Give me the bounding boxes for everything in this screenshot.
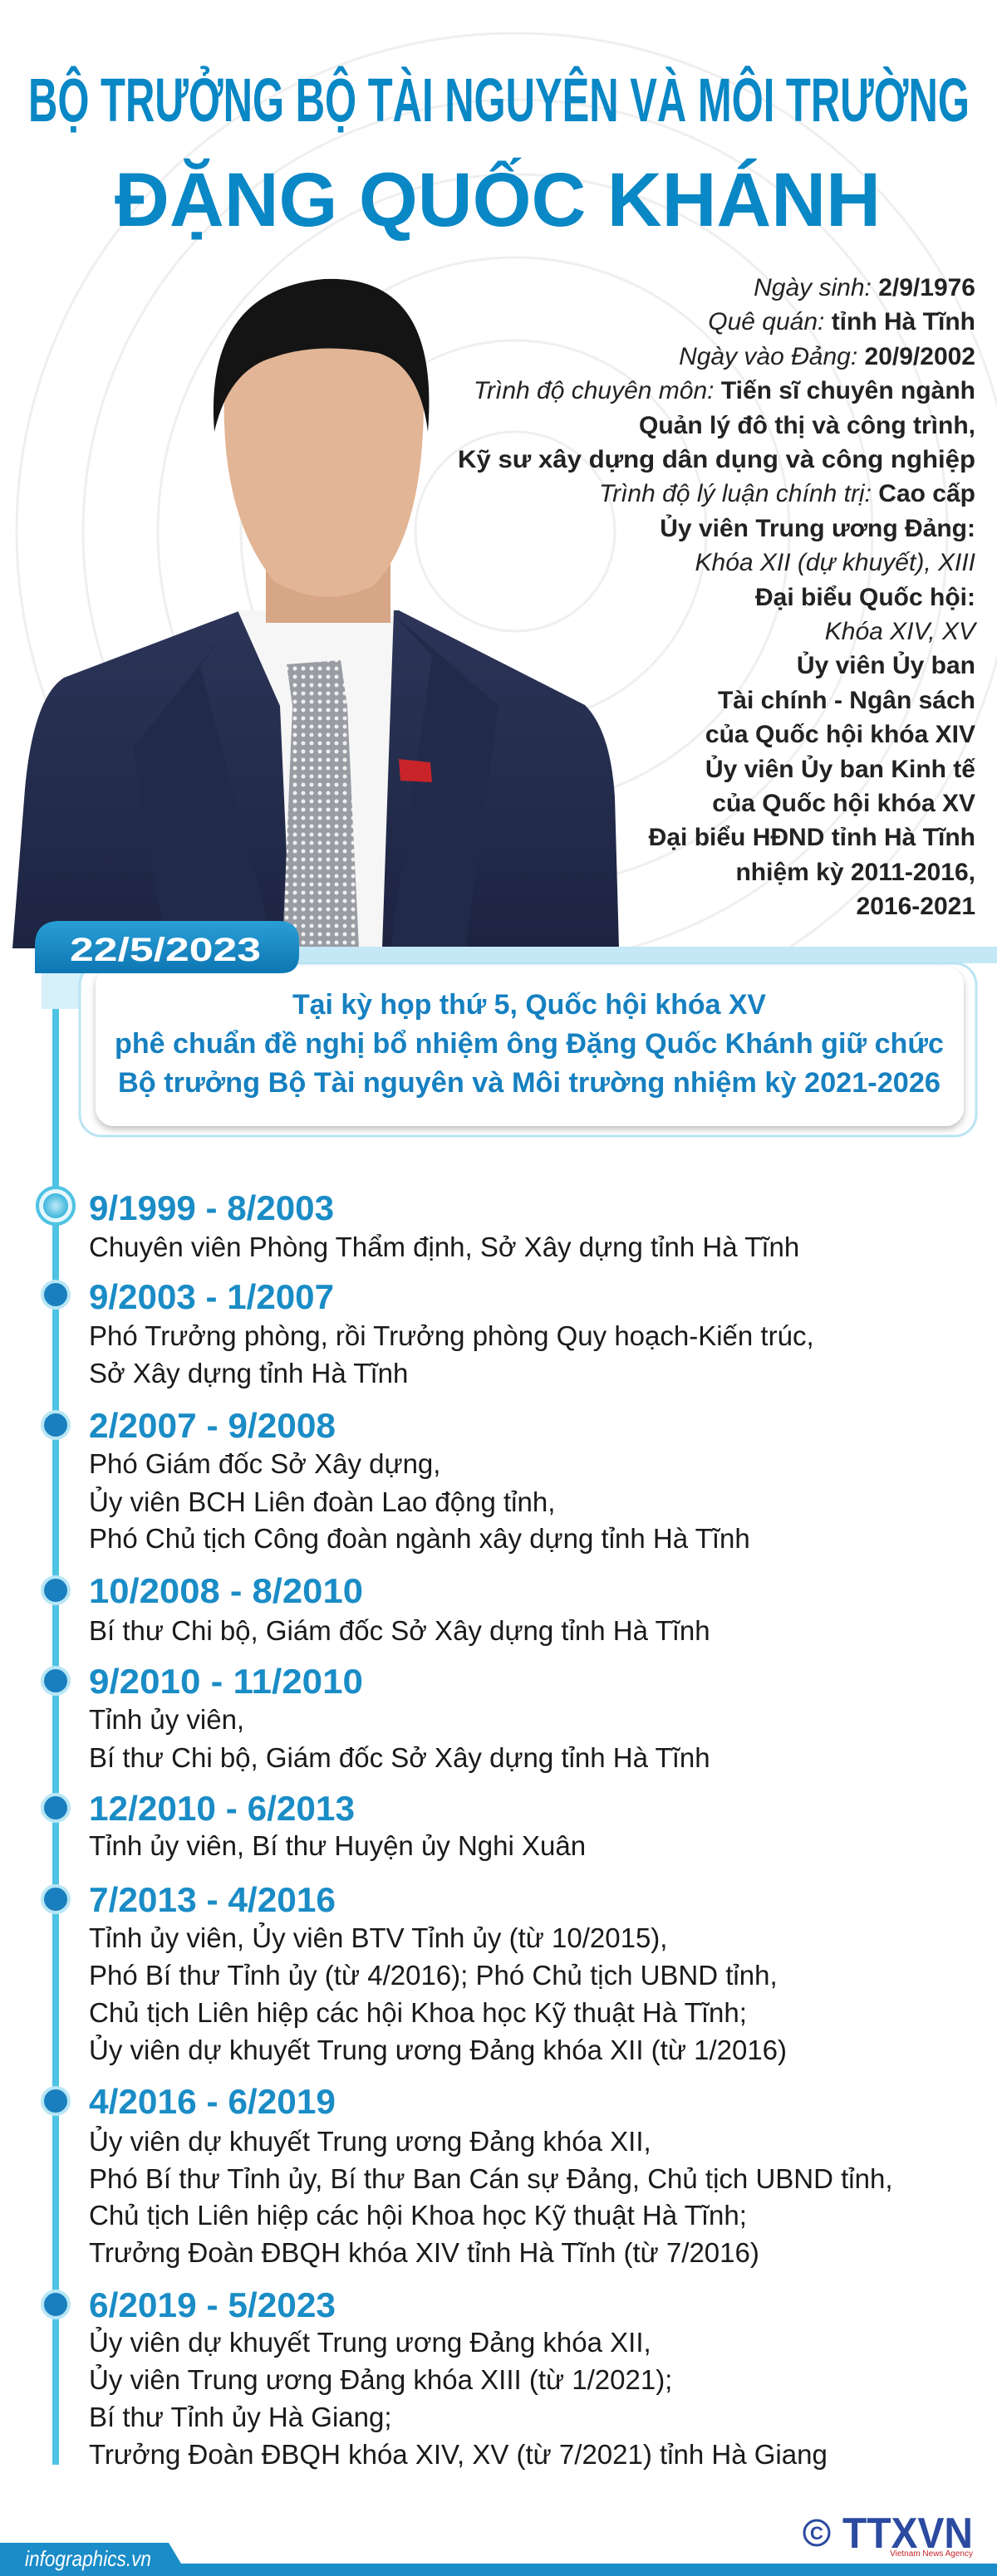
timeline entry 5	[42, 1662, 710, 1773]
timeline entry 8: Trưởng Đoàn ĐBQH khóa XIV tỉnh Hà Tĩnh (từ 7/2016)	[89, 2237, 759, 2268]
timeline entry 1: Chuyên viên Phòng Thẩm định, Sở Xây dựng tỉnh Hà Tĩnh	[89, 1232, 799, 1262]
timeline line	[52, 967, 59, 2465]
timeline entry 2: 9/2003 - 1/2007	[89, 1277, 334, 1316]
personal info	[458, 274, 978, 920]
personal info: Quê quán: tỉnh Hà Tĩnh	[708, 308, 975, 335]
footer bar	[0, 2543, 997, 2576]
timeline entry 9	[42, 2285, 828, 2470]
logo: TTXVN: TTXVN	[842, 2510, 973, 2558]
personal info: Tài chính - Ngân sách	[718, 687, 975, 714]
timeline entry 1	[37, 1188, 799, 1262]
timeline entry 9: Ủy viên dự khuyết Trung ương Đảng khóa XII,	[89, 2327, 651, 2358]
highlight text: Tại kỳ họp thứ 5, Quốc hội khóa XV	[292, 989, 766, 1021]
personal info: Ủy viên Trung ương Đảng:	[660, 514, 975, 542]
timeline entry 6: Tỉnh ủy viên, Bí thư Huyện ủy Nghi Xuân	[89, 1830, 586, 1861]
timeline entry 8: Chủ tịch Liên hiệp các hội Khoa học Kỹ thuật Hà Tĩnh;	[89, 2200, 747, 2231]
timeline entry 8	[42, 2082, 893, 2268]
timeline entry 7: Ủy viên dự khuyết Trung ương Đảng khóa XII (từ 1/2016)	[89, 2035, 787, 2065]
footer bar: infographics.vn	[25, 2546, 151, 2571]
timeline entry 3: Phó Chủ tịch Công đoàn ngành xây dựng tỉnh Hà Tĩnh	[89, 1523, 750, 1554]
background drum pattern	[17, 33, 997, 1030]
timeline entry 8: 4/2016 - 6/2019	[89, 2082, 336, 2121]
timeline entry 7: 7/2013 - 4/2016	[89, 1880, 336, 1919]
personal info: Trình độ lý luận chính trị: Cao cấp	[599, 480, 975, 507]
highlight text: phê chuẩn đề nghị bổ nhiệm ông Đặng Quốc Khánh giữ chức	[115, 1028, 944, 1060]
date tab	[35, 921, 299, 973]
timeline entry 5: Bí thư Chi bộ, Giám đốc Sở Xây dựng tỉnh Hà Tĩnh	[89, 1742, 710, 1773]
timeline entry 9: 6/2019 - 5/2023	[89, 2285, 336, 2324]
timeline entry 2: Sở Xây dựng tỉnh Hà Tĩnh	[89, 1358, 408, 1388]
personal info: Ngày sinh: 2/9/1976	[754, 274, 975, 301]
timeline entry 6	[42, 1789, 586, 1861]
timeline entry 4	[42, 1571, 710, 1646]
personal info: Kỹ sư xây dựng dân dụng và công nghiệp	[458, 446, 975, 473]
personal info: Đại biểu Quốc hội:	[755, 584, 975, 611]
personal info: nhiệm kỳ 2011-2016,	[735, 859, 975, 886]
timeline entry 7: Phó Bí thư Tỉnh ủy (từ 4/2016); Phó Chủ tịch UBND tỉnh,	[89, 1960, 778, 1991]
logo: TTXVN: C	[810, 2523, 823, 2544]
personal info: Ủy viên Ủy ban Kinh tế	[705, 755, 975, 783]
title	[28, 66, 970, 242]
personal info: 2016-2021	[857, 893, 975, 920]
timeline entry 7: Chủ tịch Liên hiệp các hội Khoa học Kỹ thuật Hà Tĩnh;	[89, 1997, 747, 2028]
timeline entry 9: Bí thư Tỉnh ủy Hà Giang;	[89, 2402, 392, 2432]
timeline entry 3: Phó Giám đốc Sở Xây dựng,	[89, 1448, 440, 1479]
timeline entry 7: Tỉnh ủy viên, Ủy viên BTV Tỉnh ủy (từ 10/2015),	[89, 1922, 667, 1953]
timeline entry 1: 9/1999 - 8/2003	[89, 1188, 334, 1227]
timeline entry 6: 12/2010 - 6/2013	[89, 1789, 355, 1828]
timeline entry 4: Bí thư Chi bộ, Giám đốc Sở Xây dựng tỉnh Hà Tĩnh	[89, 1615, 710, 1646]
personal info: của Quốc hội khóa XV	[712, 790, 975, 817]
personal info: Khóa XII (dự khuyết), XIII	[695, 549, 975, 576]
highlight text: Bộ trưởng Bộ Tài nguyên và Môi trường nhiệm kỳ 2021-2026	[118, 1067, 941, 1099]
timeline entry 8: Phó Bí thư Tỉnh ủy, Bí thư Ban Cán sự Đảng, Chủ tịch UBND tỉnh,	[89, 2163, 893, 2194]
light strip under photo	[249, 947, 997, 963]
timeline entry 7	[42, 1880, 787, 2065]
timeline entry 4: 10/2008 - 8/2010	[89, 1571, 363, 1610]
personal info: Trình độ chuyên môn: Tiến sĩ chuyên ngành	[474, 377, 975, 404]
timeline entry 5: Tỉnh ủy viên,	[89, 1704, 244, 1735]
timeline entry 3: 2/2007 - 9/2008	[89, 1406, 336, 1445]
highlight text	[115, 989, 944, 1099]
personal info: Đại biểu HĐND tỉnh Hà Tĩnh	[649, 824, 975, 851]
personal info: Ủy viên Ủy ban	[797, 651, 975, 679]
personal info: Quản lý đô thị và công trình,	[639, 412, 975, 439]
timeline entry 2	[42, 1277, 814, 1388]
timeline entry 8: Ủy viên dự khuyết Trung ương Đảng khóa XII,	[89, 2126, 651, 2157]
date tab: 22/5/2023	[70, 932, 261, 968]
timeline entry 5: 9/2010 - 11/2010	[89, 1662, 363, 1701]
timeline entry 9: Ủy viên Trung ương Đảng khóa XIII (từ 1/2021);	[89, 2364, 672, 2395]
timeline entry 9: Trưởng Đoàn ĐBQH khóa XIV, XV (từ 7/2021) tỉnh Hà Giang	[89, 2439, 828, 2470]
timeline entry 3: Ủy viên BCH Liên đoàn Lao động tỉnh,	[89, 1486, 555, 1517]
highlight box: 22/5/2023	[35, 921, 976, 1136]
logo: TTXVN: Vietnam News Agency	[890, 2549, 973, 2559]
personal info: Ngày vào Đảng: 20/9/2002	[679, 343, 975, 370]
portrait photo	[12, 279, 619, 948]
timeline entry 2: Phó Trưởng phòng, rồi Trưởng phòng Quy hoạch-Kiến trúc,	[89, 1320, 814, 1351]
timeline entry 3	[42, 1406, 750, 1554]
personal info: Khóa XIV, XV	[825, 618, 978, 645]
title: ĐẶNG QUỐC KHÁNH	[115, 157, 881, 242]
personal info: của Quốc hội khóa XIV	[705, 721, 975, 748]
